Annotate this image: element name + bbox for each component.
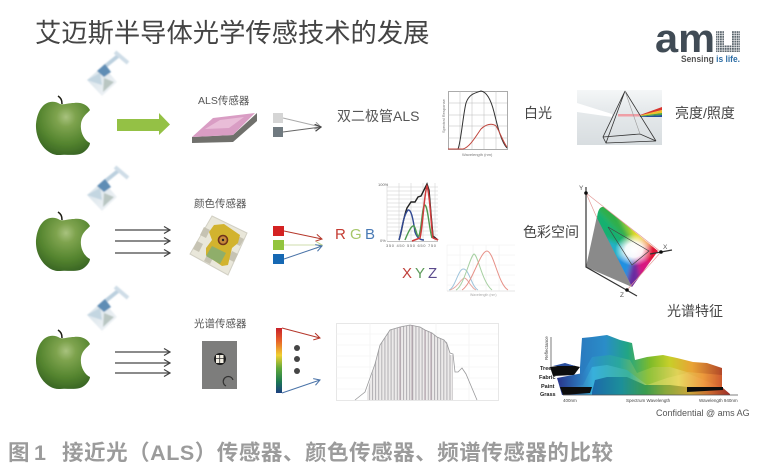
chart: spectral signature landscape: 400nm xyxy=(563,398,577,403)
title: 艾迈斯半导体光学传感技术的发展 xyxy=(35,18,429,48)
chart: spectral signature landscape: Reflectance xyxy=(544,336,549,360)
icon: flashlight 2 xyxy=(87,167,128,211)
chart: ALS response: Wavelength (nm) xyxy=(462,152,493,157)
icon: apple 2 xyxy=(36,212,90,271)
label: XYZ: X xyxy=(402,265,412,282)
chart: colour space triangle xyxy=(579,185,672,299)
icon: flashlight 1 xyxy=(87,52,128,96)
icon: apple 1 xyxy=(36,96,90,155)
confidential note: Confidential @ ams AG xyxy=(656,408,750,418)
label: spectral signature: 光谱特征 xyxy=(667,303,723,319)
colour sensor label: 颜色传感器 xyxy=(194,197,247,210)
ALS sensor label: ALS传感器 xyxy=(198,94,250,107)
icon: flashlight 3 xyxy=(87,287,128,331)
chart: ALS response: Spectral Response xyxy=(441,98,446,133)
icon: prism xyxy=(577,90,662,145)
caption: 图1 xyxy=(8,441,46,465)
label: colour space: 色彩空间 xyxy=(523,224,579,240)
row 1: ambient light sensing xyxy=(36,52,735,157)
chart: XYZ spectral response xyxy=(447,245,515,297)
label: RGB: G xyxy=(350,226,362,243)
chart: measured spectrum xyxy=(336,323,498,400)
arrows: three light rays xyxy=(115,352,170,373)
chart: spectral signature landscape xyxy=(539,335,738,403)
chart: spectral signature landscape: Wavelength 940nm xyxy=(699,398,738,403)
chart: spectral signature landscape: Paint xyxy=(541,384,555,390)
logo: ams: Sensing is life. xyxy=(681,54,740,65)
chart: spectral signature landscape: Spectrum Wavelength xyxy=(626,398,671,403)
icon: apple 3 xyxy=(36,330,90,389)
label: XYZ: Z xyxy=(428,265,437,282)
chart: colour space triangle: X xyxy=(663,244,668,251)
logo: ams: am xyxy=(655,17,715,61)
chart: spectral signature landscape: Fabric xyxy=(539,375,556,381)
label: RGB: R xyxy=(335,226,346,243)
label: RGB: B xyxy=(365,226,375,243)
chart: RGB spectral response xyxy=(378,182,438,248)
spectral filter and arrows xyxy=(276,328,320,393)
arrows: three light rays xyxy=(115,230,170,253)
light and dark diode arrows xyxy=(273,113,321,137)
label: XYZ: Y xyxy=(415,265,425,282)
chart: colour space triangle: Y xyxy=(579,185,584,192)
spectral sensor label: 光谱传感器 xyxy=(194,317,247,330)
caption: 接近光（ALS）传感器、颜色传感器、频谱传感器的比较 xyxy=(62,440,613,465)
chart: XYZ spectral response: Wavelength (nm) xyxy=(470,293,497,297)
chart: RGB spectral response: 350 450 550 650 750 xyxy=(386,243,437,248)
label: XYZ xyxy=(402,265,437,282)
RGB filters and arrows xyxy=(273,226,322,264)
row 2: colour sensing xyxy=(36,167,672,299)
label: luminance and illuminance: 亮度/照度 xyxy=(675,105,735,121)
label: white light: 白光 xyxy=(524,105,552,121)
logo: ams xyxy=(655,17,740,65)
icon: ALS sensor chip xyxy=(192,113,257,143)
chart: colour space triangle: Z xyxy=(620,292,624,299)
icon: colour sensor chip xyxy=(190,216,247,275)
label: dual diode ALS: 双二极管ALS xyxy=(337,108,419,124)
chart: ALS response xyxy=(441,91,508,157)
label: RGB xyxy=(335,226,375,243)
row 3: spectral sensing xyxy=(36,287,750,418)
chart: RGB spectral response: 100% xyxy=(378,182,389,187)
icon: spectral sensor chip xyxy=(202,341,237,389)
chart: RGB spectral response: 0% xyxy=(380,238,386,243)
chart: spectral signature landscape: Grass xyxy=(540,392,556,398)
chart: spectral signature landscape: Tree xyxy=(540,366,551,372)
arrow: green xyxy=(117,113,170,135)
